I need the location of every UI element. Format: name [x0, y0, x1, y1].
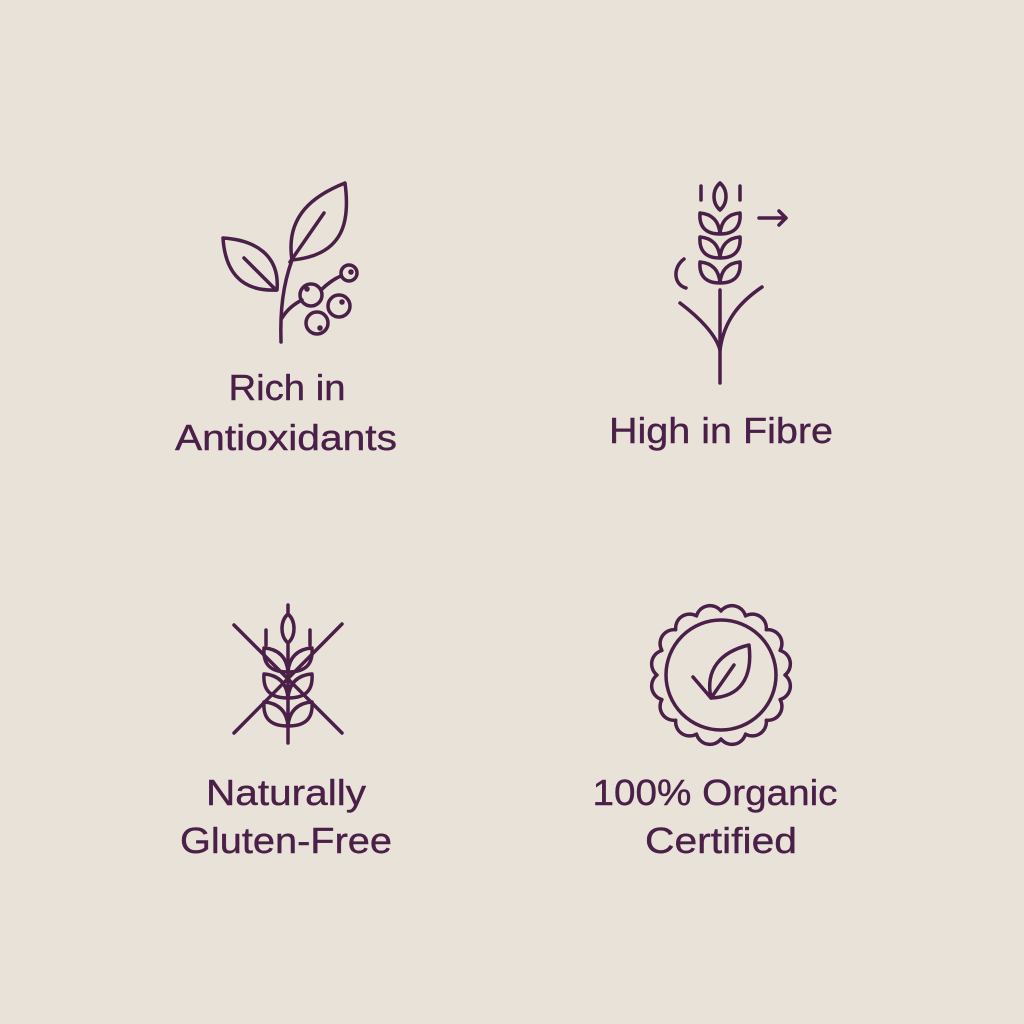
label: Rich in Antioxidants: Rich in	[228, 367, 346, 408]
label: 100% Organic Certified: Certified	[645, 820, 797, 861]
icon: crossed-out wheat	[234, 605, 342, 743]
label: Rich in Antioxidants	[175, 367, 397, 458]
icon: leaf and berries	[223, 183, 357, 342]
label: High in Fibre: High in Fibre	[609, 410, 833, 451]
icon: organic seal	[652, 606, 790, 744]
label: Naturally Gluten-Free: Naturally	[206, 772, 366, 813]
label: Rich in Antioxidants: Antioxidants	[175, 417, 397, 458]
label: Naturally Gluten-Free: Gluten-Free	[180, 820, 392, 861]
icon: wheat with arrow	[676, 183, 786, 383]
label: 100% Organic Certified	[592, 772, 838, 861]
label: 100% Organic Certified: 100% Organic	[592, 772, 838, 813]
label: Naturally Gluten-Free	[180, 772, 392, 861]
